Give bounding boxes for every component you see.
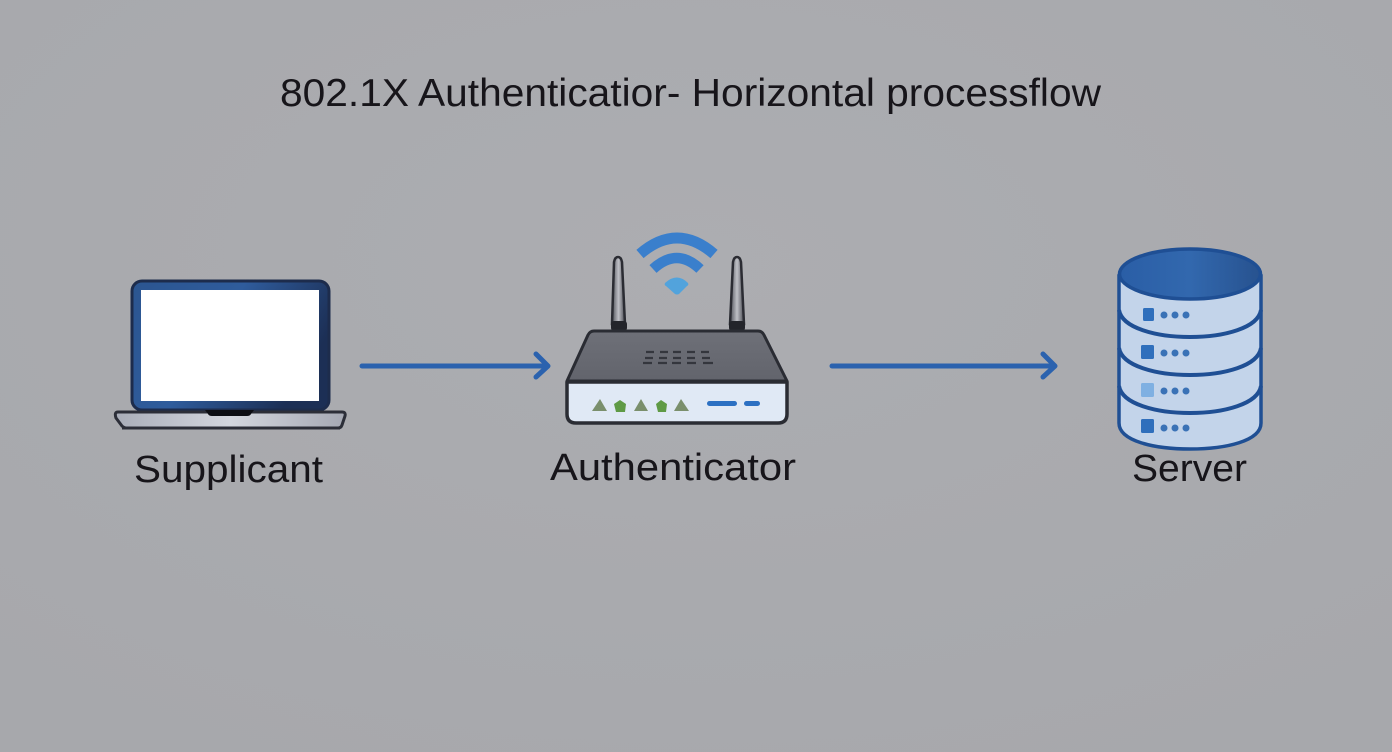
label: Supplicant: Supplicant	[134, 449, 323, 491]
icon: wifi signal	[640, 238, 714, 294]
icon: database server	[1119, 249, 1261, 449]
router vents	[643, 352, 713, 363]
router lights	[592, 399, 760, 412]
arrow: authenticator to server	[832, 354, 1055, 377]
icon: laptop (supplicant)	[115, 281, 345, 428]
icon: router (authenticator)	[567, 257, 787, 423]
title: 802.1X Authenticatior- Horizontal processflow	[280, 72, 1102, 115]
router top	[567, 331, 787, 381]
router antennas	[611, 257, 745, 331]
arrow: supplicant to authenticator	[362, 354, 548, 377]
label: Authenticator: Authenticator	[550, 447, 796, 489]
server drive indicators	[1141, 308, 1190, 433]
label: Server: Server	[1132, 448, 1247, 490]
router front	[567, 382, 787, 423]
